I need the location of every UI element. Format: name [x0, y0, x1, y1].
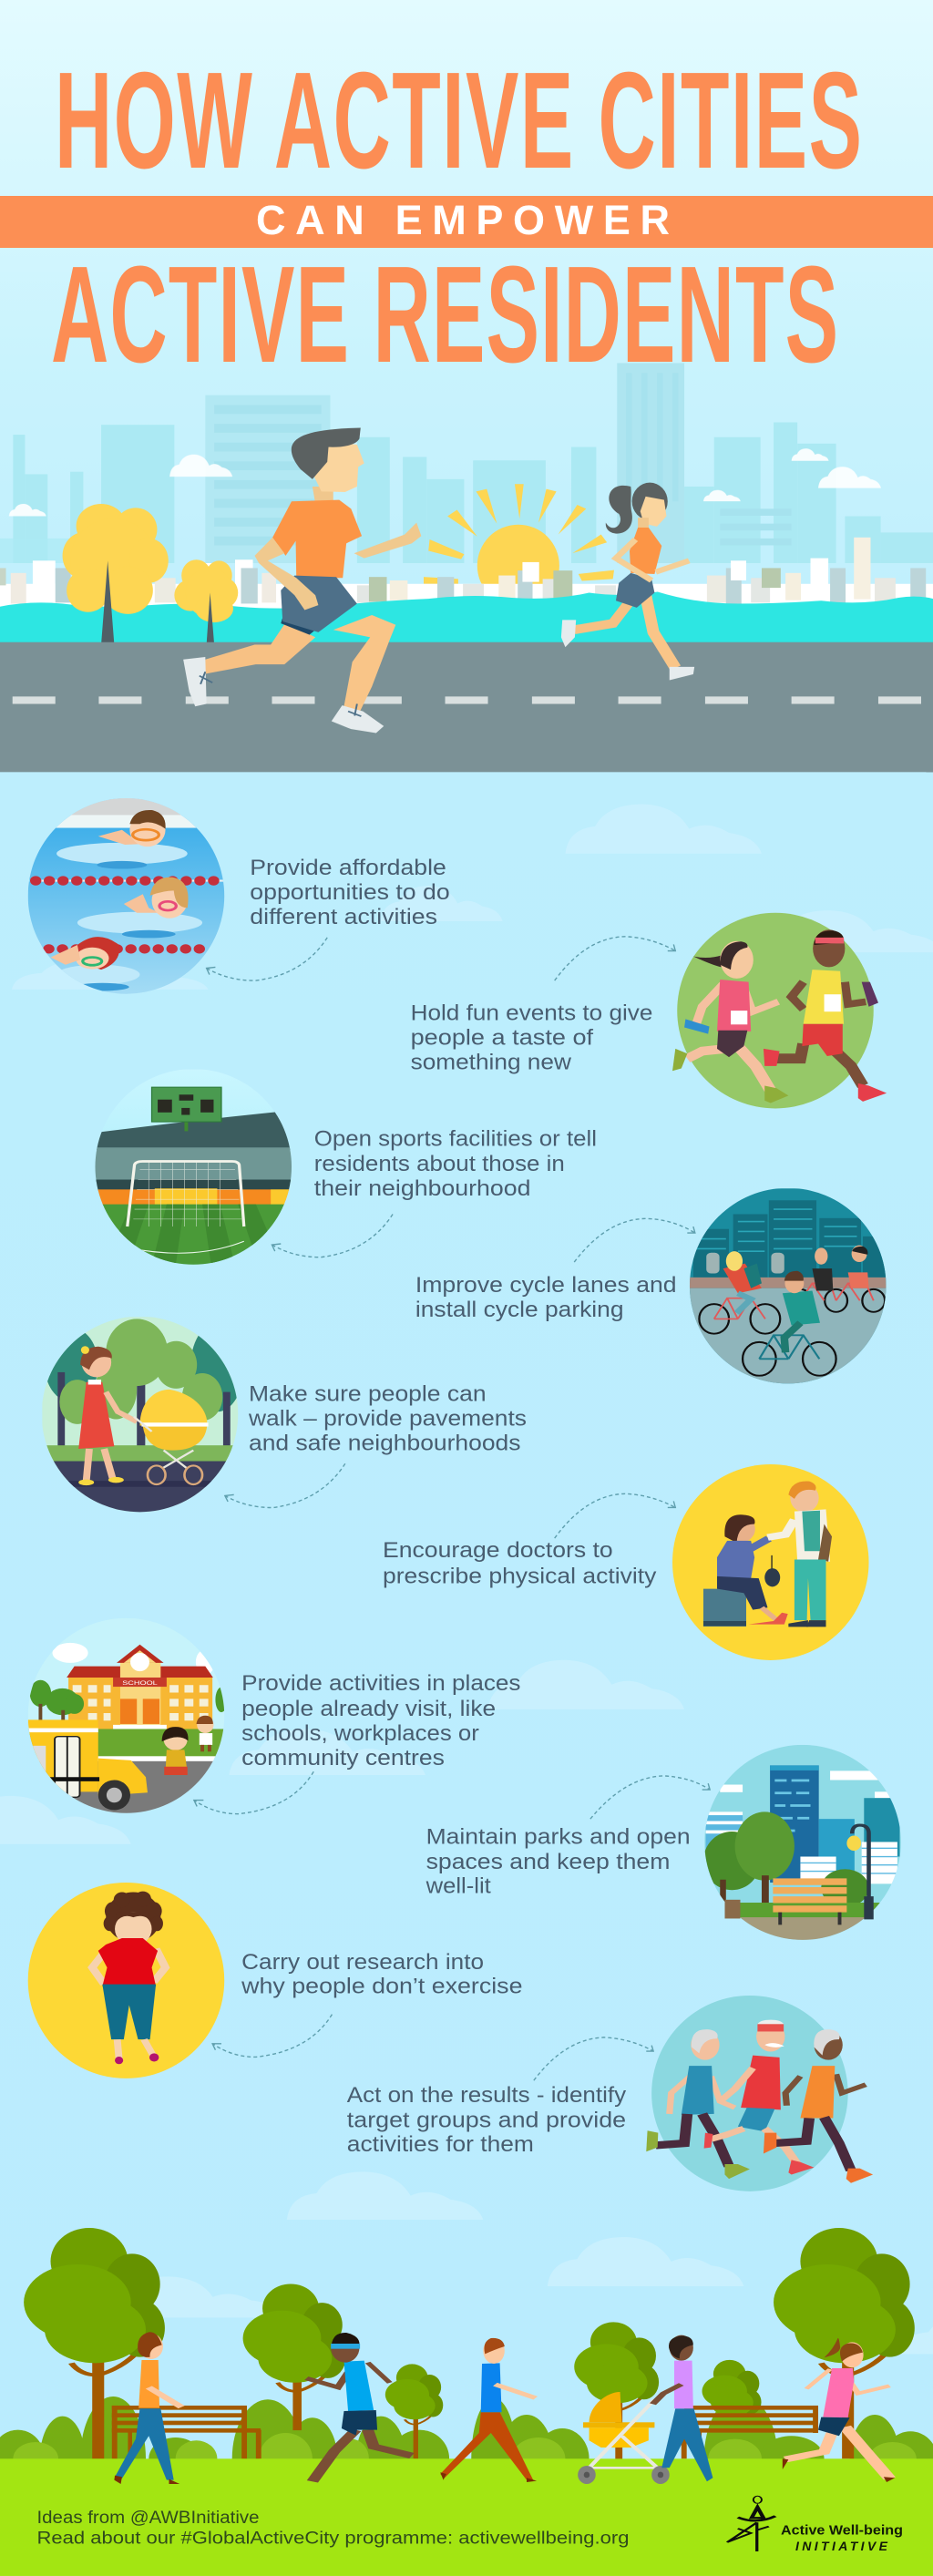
text block [347, 2083, 627, 2157]
icon: two race runners [672, 913, 887, 1108]
panel: step 1 affordable opportunities [28, 798, 450, 996]
right runner [764, 2029, 873, 2183]
title banner: can empower [0, 196, 933, 248]
white clouds [9, 448, 881, 516]
text block: and safe neighbourhoods [249, 1432, 521, 1456]
text block: well-lit [425, 1873, 491, 1899]
logo: Active Well-being Initiative [727, 2496, 903, 2553]
text block: schools, workplaces or [241, 1721, 479, 1746]
text block: Hold fun events to give [411, 1001, 652, 1025]
title: How Active Cities: HOW ACTIVE CITIES [55, 44, 862, 198]
text block: people already visit, like [241, 1697, 496, 1721]
text block: target groups and provide [347, 2109, 626, 2133]
background clouds [0, 805, 933, 2354]
text block: Make sure people can [249, 1381, 487, 1406]
text block [250, 856, 450, 929]
logo text [781, 2523, 903, 2553]
text block: their neighbourhood [314, 1176, 530, 1201]
grass [0, 2458, 933, 2576]
left runner [646, 2029, 750, 2179]
person running, pink shirt [783, 2338, 895, 2482]
text block: Provide activities in places [241, 1671, 521, 1696]
arrow [194, 1771, 313, 1814]
text block: Maintain parks and open [426, 1824, 691, 1849]
text block [241, 1671, 521, 1770]
arrow [225, 1463, 345, 1507]
arrow [590, 1776, 710, 1819]
footer text: Read about our #GlobalActiveCity programme: activewellbeing.org [36, 2530, 629, 2549]
panel: city and runners hero scene [0, 363, 933, 772]
panel: step 7 schools and workplaces [28, 1618, 521, 1816]
pram [578, 2392, 670, 2484]
text block: Provide affordable [250, 856, 446, 880]
road [0, 642, 933, 772]
icon: school and bus [28, 1618, 227, 1816]
text block: walk – provide pavements [248, 1407, 527, 1431]
arrow [212, 2015, 332, 2057]
goal net [128, 1161, 244, 1226]
trees [24, 2228, 915, 2460]
title: Active Residents: ACTIVE RESIDENTS [51, 238, 838, 392]
text block [425, 1824, 691, 1899]
text block: prescribe physical activity [383, 1565, 657, 1589]
text block [383, 1538, 657, 1589]
text block: people a taste of [411, 1026, 593, 1050]
text block: opportunities to do [250, 880, 450, 905]
icon: swimmers in a pool [28, 798, 225, 996]
text block: different activities [250, 905, 437, 929]
text block: Act on the results - identify [347, 2083, 627, 2108]
city skyline [0, 363, 933, 563]
text block: activities for them [347, 2132, 534, 2157]
sun [424, 484, 614, 607]
person walking, red trousers [440, 2338, 537, 2482]
footer text [36, 2509, 629, 2549]
panel: step 10 act on results [347, 1996, 873, 2191]
text block [411, 1001, 652, 1075]
arrow [272, 1214, 393, 1257]
icon: park with bench and towers [703, 1745, 901, 1943]
icon: football stadium [95, 1070, 292, 1267]
panel: step 2 fun events [411, 913, 887, 1108]
text block [314, 1127, 597, 1201]
arrow [555, 937, 675, 980]
person pushing pram [652, 2335, 713, 2481]
icon: three older runners [646, 1996, 873, 2191]
panel: step 8 parks [425, 1745, 901, 1943]
bushes [0, 2395, 933, 2522]
text block: something new [411, 1051, 571, 1075]
road dashes [13, 696, 921, 703]
icon: female runner [561, 483, 694, 680]
title banner: can empower: CAN EMPOWER [256, 197, 670, 243]
panel: step 6 doctors [383, 1464, 869, 1660]
panel: step 9 research [28, 1883, 523, 2078]
panel: step 3 sports facilities [95, 1070, 597, 1267]
text block: community centres [241, 1746, 445, 1770]
benches [112, 2406, 818, 2458]
logo text: Active Well-being [781, 2523, 903, 2539]
teal river [0, 591, 933, 644]
middle runner [704, 2020, 814, 2175]
icon: school and bus: SCHOOL [122, 1679, 158, 1686]
icon: male runner [183, 427, 421, 733]
text block [248, 1381, 527, 1456]
logo text: INITIATIVE [795, 2539, 888, 2553]
text block: spaces and keep them [426, 1850, 670, 1874]
icon: doctor and patient [672, 1464, 869, 1660]
text block: Encourage doctors to [383, 1538, 613, 1563]
panel: step 5 walking [42, 1317, 527, 1514]
person running, blue headband [306, 2333, 412, 2481]
text block: Improve cycle lanes and [415, 1273, 677, 1298]
icon: woman with pram in a park [42, 1317, 244, 1514]
logo figure [727, 2496, 775, 2551]
icon: woman in red shirt [28, 1883, 224, 2078]
text block: Carry out research into [241, 1950, 484, 1975]
text block: install cycle parking [415, 1298, 623, 1322]
text block [241, 1950, 523, 1999]
yellow trees [63, 504, 238, 644]
foreground low buildings [0, 538, 933, 609]
arrow [555, 1493, 675, 1538]
text block [415, 1273, 677, 1322]
text block: residents about those in [314, 1152, 565, 1176]
arrow [534, 2037, 653, 2080]
text block: why people don’t exercise [241, 1975, 523, 1999]
text block: Open sports facilities or tell [314, 1127, 597, 1152]
arrow [207, 938, 327, 980]
panel: step 4 cycle lanes [415, 1188, 887, 1387]
person walking, orange shirt [114, 2332, 181, 2484]
footer text: Ideas from @AWBInitiative [36, 2509, 259, 2528]
arrow [574, 1218, 695, 1262]
panel: park footer scene [0, 2228, 933, 2576]
icon: cyclists in a city [690, 1188, 887, 1387]
